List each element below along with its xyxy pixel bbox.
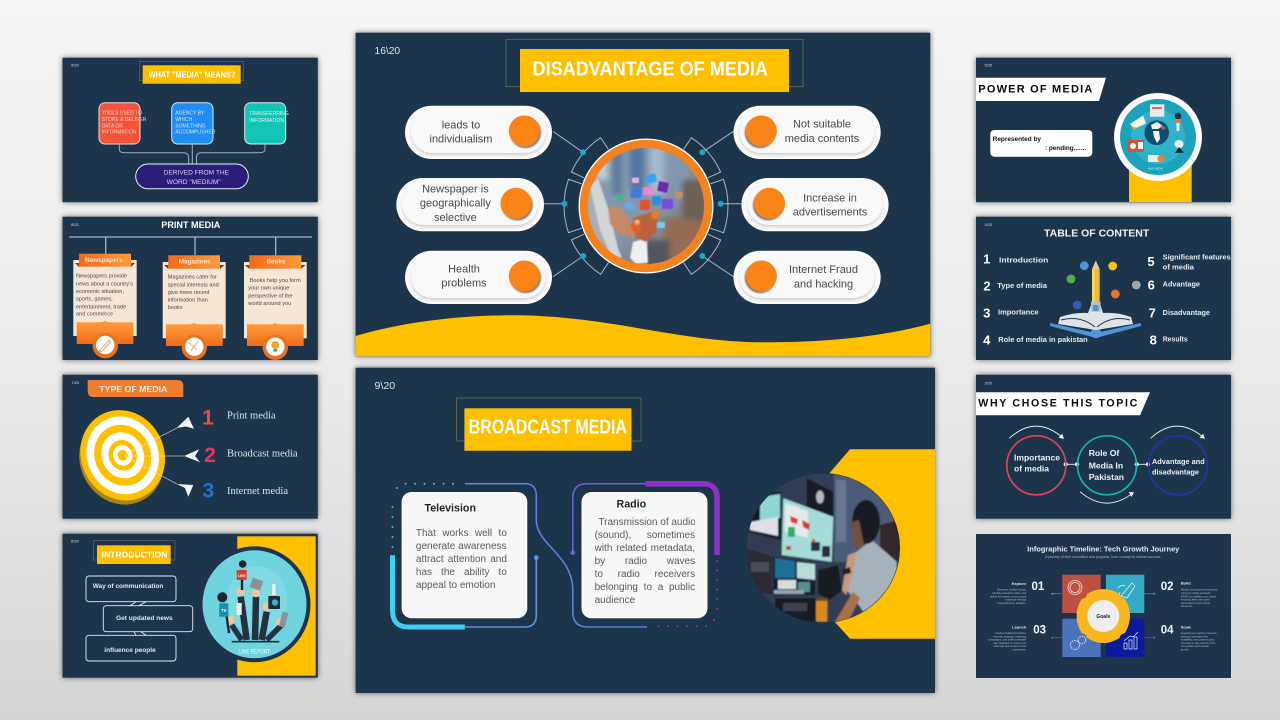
card: magazines: books	[168, 305, 183, 311]
step: scale: scalability, and continuously	[1181, 638, 1214, 642]
card: radio: audience	[595, 594, 635, 606]
heading: print media: PRINT MEDIA	[161, 220, 221, 230]
heading: type of media	[88, 380, 183, 397]
card: radio: to radio receivers	[595, 568, 695, 580]
card: television: attract attention and	[416, 554, 507, 565]
box: agency: WHICH	[175, 117, 193, 123]
card: books: your own unique	[248, 286, 289, 292]
box: transferring: INFORMATION	[249, 118, 284, 124]
list: contents left: 4	[983, 333, 991, 348]
icon: light bulb	[271, 341, 279, 352]
pill: internet fraud and hacking: and hacking	[794, 278, 853, 290]
pill: newspaper is geographically selective: selective	[434, 212, 477, 224]
heading: type of media: TYPE OF MEDIA	[99, 384, 167, 394]
heading: what media means	[139, 61, 243, 84]
card: magazines: Magazines cater for	[168, 275, 217, 281]
page number: 6\20	[71, 538, 80, 544]
list: introduction boxes: Way of communication	[93, 583, 163, 590]
circle: advantage and disadvantage: Advantage and	[1152, 457, 1205, 466]
panel: why chose this topic slide	[976, 375, 1231, 519]
page number: 5\20	[984, 62, 993, 68]
list: contents left: Introduction	[999, 255, 1049, 264]
card: radio: with related metadata,	[595, 542, 695, 554]
panel: power of media slide	[976, 58, 1231, 202]
list: contents right: 6	[1148, 277, 1155, 292]
heading: broadcast media	[456, 398, 641, 451]
circle: advantage and disadvantage	[1148, 436, 1208, 495]
step: explore: 01	[1032, 581, 1045, 593]
card: newspapers: entertainment, trade	[76, 304, 126, 310]
pill: derived from the word medium: DERIVED FROM THE	[164, 170, 230, 177]
heading: disadvantage of media: DISADVANTAGE OF MEDIA	[532, 59, 768, 81]
page number: 3\20	[984, 380, 993, 386]
list: contents left: 2	[983, 279, 991, 294]
pill: leads to individualism	[405, 106, 552, 159]
card: radio: by radio waves	[595, 556, 695, 566]
heading: what media means: WHAT "MEDIA" MEANS?	[149, 69, 235, 79]
step: build	[1161, 580, 1218, 608]
box: represented by pending	[990, 130, 1092, 157]
page number: 16\20	[374, 46, 401, 57]
circle: role of media in pakistan	[1078, 436, 1136, 495]
circle: importance of media: of media	[1014, 463, 1049, 473]
list: introduction boxes: Get updated news	[116, 615, 173, 622]
panel: disadvantage of media slide	[356, 33, 930, 356]
icon: rocket	[1118, 583, 1135, 600]
step: launch: Deploy finalized products,	[996, 631, 1027, 635]
pill: newspaper is geographically selective: geographically	[420, 198, 491, 210]
list: contents right: 7	[1149, 305, 1156, 320]
card: magazines: special interests and	[168, 282, 219, 288]
card: newspapers: sports, games,	[76, 297, 113, 303]
heading: disadvantage of media	[506, 39, 803, 92]
pill: newspaper is geographically selective: Newspaper is	[422, 183, 489, 195]
step: build: 02	[1161, 581, 1173, 593]
card: television	[402, 492, 527, 618]
step: build: Build	[1181, 580, 1191, 585]
card: books: Books help you form	[250, 278, 301, 284]
circle: importance of media: Importance	[1014, 452, 1060, 462]
pill: newspaper is geographically selective	[396, 178, 544, 231]
pill: derived from the word medium: WORD "MEDIUM"	[167, 179, 221, 186]
list: media types	[202, 406, 298, 503]
card: magazines: information than	[168, 298, 208, 304]
pill: internet fraud and hacking: Internet Fraud	[789, 264, 858, 276]
step: scale: optimize operations for	[1181, 634, 1208, 638]
icon: pencil	[99, 340, 110, 352]
step: build: minimum viable products	[1181, 591, 1211, 595]
icon: gears	[1070, 636, 1086, 650]
card: books	[244, 255, 307, 360]
illustration: mass media circle: MASS MEDIA	[1148, 166, 1163, 170]
list: contents left: 3	[983, 306, 990, 321]
heading: why chose this topic	[976, 392, 1150, 415]
heading: table of content: TABLE OF CONTENT	[1044, 229, 1149, 240]
step: launch: user feedback to refine your	[993, 641, 1026, 645]
panel: broadcast media slide	[356, 368, 935, 693]
step: launch: Launch	[1012, 624, 1027, 629]
list: contents right: Significant features	[1163, 252, 1231, 261]
illustration: live report: LIVE	[238, 574, 246, 578]
card: newspapers: news about a country's	[76, 281, 133, 287]
box: tools: STORE & DELIVER	[102, 117, 147, 123]
list: contents right	[1147, 252, 1231, 348]
central photo: hand with app icons	[578, 138, 714, 274]
card: magazines: give more recent	[168, 290, 210, 296]
step: launch	[988, 624, 1046, 652]
page number: 9\20	[71, 62, 80, 68]
connectors and arcs	[1009, 426, 1204, 503]
pill: health problems	[405, 251, 552, 304]
step: launch: 03	[1033, 624, 1046, 636]
yellow pedestal	[1129, 163, 1192, 202]
step: build: expectations and market	[1181, 601, 1210, 605]
bottom yellow wave	[356, 315, 930, 356]
step: build: demands.	[1181, 604, 1193, 608]
card: newspapers: Newspapers	[85, 257, 123, 264]
step: launch: experience.	[1012, 648, 1027, 652]
icon: scissors	[188, 341, 198, 351]
card: newspapers: economic situation,	[76, 289, 124, 295]
list: introduction boxes	[86, 576, 193, 661]
step: build: Design prototypes and develop	[1181, 588, 1218, 592]
heading: timeline: Infographic Timeline: Tech Growth Journey	[1027, 545, 1180, 554]
step: scale: growth.	[1181, 648, 1190, 652]
list: media types: 2	[204, 444, 216, 467]
page number: 4\20	[984, 222, 993, 227]
box: represented by pending: Represented by	[993, 136, 1042, 143]
yellow side panel	[237, 536, 316, 676]
quadrant chart: goals	[1062, 575, 1144, 657]
card: newspapers: Newspapers provide	[76, 274, 127, 280]
connectors	[119, 144, 265, 164]
illustration: mass media circle	[1114, 93, 1202, 181]
step: build: ensuring they meet user	[1181, 598, 1210, 602]
list: contents left: 1	[983, 251, 990, 266]
yellow hexagon backdrop	[815, 449, 935, 639]
circle: advantage and disadvantage: disadvantage	[1152, 467, 1199, 476]
list: contents left: Importance	[998, 308, 1039, 317]
page number: 9\20	[374, 381, 396, 392]
card: magazines: Magazines	[179, 259, 211, 266]
arrows into target	[124, 417, 200, 497]
step: scale: 04	[1161, 624, 1174, 636]
card: radio: belonging to a public	[595, 582, 695, 592]
list: contents right: 8	[1150, 333, 1157, 348]
list: media types: 3	[202, 480, 214, 503]
icon: chat faces	[1068, 580, 1082, 594]
heading: timeline	[1027, 545, 1180, 559]
heading: power of media	[976, 78, 1106, 101]
list: contents right: of media	[1163, 262, 1195, 271]
box: agency	[172, 103, 216, 144]
list: contents left: Role of media in pakistan	[998, 335, 1088, 344]
list: contents left: Type of media	[997, 281, 1048, 290]
box: agency: SOMETHING	[175, 123, 206, 129]
pill: derived from the word medium	[136, 164, 248, 189]
illustration: live report	[198, 546, 310, 662]
step: launch: campaigns, and collect valuable	[988, 638, 1027, 642]
step: explore: audience through	[1006, 598, 1027, 602]
list: introduction boxes: influence people	[104, 647, 156, 654]
box: agency: AGENCY BY	[175, 111, 205, 117]
step: explore	[990, 581, 1045, 605]
card: radio: Radio	[616, 499, 646, 511]
card: magazines	[163, 255, 226, 360]
step: scale: Scale	[1181, 624, 1192, 629]
step: explore: comprehensive analysis.	[997, 601, 1027, 605]
frame lines	[392, 484, 717, 627]
step: explore: Research market trends,	[997, 588, 1027, 592]
box: represented by pending: : pending.......	[1045, 145, 1086, 152]
photo: broadcast control room	[745, 472, 901, 624]
page number: 8\20	[71, 222, 80, 227]
card: television: generate awareness,	[416, 541, 507, 552]
card: television: Television	[424, 502, 476, 514]
panel: type of media slide	[62, 375, 318, 519]
heading: why chose this topic: WHY CHOSE THIS TOPIC	[978, 397, 1138, 409]
circle: role of media in pakistan: Media In	[1089, 460, 1123, 470]
pill: leads to individualism: individualism	[430, 134, 492, 146]
list: contents right: Disadvantage	[1163, 308, 1210, 317]
box: tools	[99, 103, 147, 144]
box: agency: ACCOMPLISHED	[175, 130, 216, 136]
page number: 7\20	[72, 380, 80, 385]
card: books: world around you	[247, 301, 291, 307]
illustration: live report: LIVE REPORT	[239, 650, 270, 656]
card: newspapers: and commerce	[76, 312, 113, 318]
step: explore: Explore	[1012, 581, 1027, 586]
pill: internet fraud and hacking	[734, 251, 881, 304]
card: television: That works well to	[416, 528, 507, 539]
card: television: has the ability to	[416, 567, 507, 578]
list: media types: Internet media	[227, 486, 288, 497]
step: scale: innovate to stay ahead of the	[1181, 641, 1216, 645]
step: scale: Expand your market presence,	[1181, 631, 1218, 635]
illustration: live report: TV	[221, 608, 227, 613]
list: contents right: Advantage	[1163, 280, 1200, 289]
list: contents right: 5	[1147, 254, 1155, 269]
heading: introduction	[93, 541, 175, 564]
list: media types: Print media	[227, 411, 276, 422]
card: radio: Transmission of audio	[598, 516, 695, 528]
card: television: appeal to emotion	[416, 580, 495, 591]
step: explore: define the needs of your target	[990, 594, 1027, 598]
box: tools: DATA OR	[102, 123, 123, 129]
heading: broadcast media: BROADCAST MEDIA	[469, 416, 627, 438]
panel: infographic timeline slide	[976, 534, 1231, 678]
step: scale	[1161, 624, 1218, 652]
pill: leads to individualism: leads to	[442, 119, 480, 131]
pill: health problems: problems	[441, 278, 487, 290]
panel: introduction slide	[62, 534, 318, 678]
target illustration	[63, 396, 181, 519]
card: books: Books	[267, 259, 286, 266]
card: books: perspective of the	[248, 293, 292, 299]
card: radio	[582, 492, 708, 618]
illustration: book and pencil	[1050, 260, 1141, 338]
list: contents right: Results	[1163, 335, 1188, 344]
pill: increase in advertisements	[741, 178, 889, 231]
centre goals shape: Goals	[1096, 614, 1110, 620]
card: newspapers	[73, 254, 137, 358]
icon: growth bars	[1124, 632, 1138, 649]
box: tools: TOOLS USED TO	[102, 111, 142, 117]
circle: role of media in pakistan: Role Of	[1089, 448, 1119, 458]
heading: timeline: A journey of tech innovation and progress, from concept to market success.	[1045, 555, 1161, 559]
card: radio: (sound), sometimes	[595, 530, 695, 540]
circle: role of media in pakistan: Pakistan	[1089, 472, 1124, 482]
panel: table of content slide	[976, 217, 1231, 360]
step: launch: execute strategic marketing	[993, 634, 1027, 638]
connector network	[544, 131, 741, 277]
pill: not suitable media contents: media contents	[785, 133, 860, 145]
pill: increase in advertisements: advertisements	[793, 207, 868, 219]
box: tools: INFORMATION	[102, 130, 137, 136]
pill: increase in advertisements: Increase in	[803, 192, 857, 204]
step: launch: offerings and enhance user	[994, 644, 1026, 648]
list: media types: 1	[202, 406, 214, 429]
list: contents left	[983, 251, 1088, 348]
step: explore: identify potential niches, and	[992, 591, 1027, 595]
pill: not suitable media contents	[734, 106, 881, 159]
circle: importance of media	[1007, 436, 1066, 495]
box: transferring	[245, 103, 289, 144]
panel: print media slide	[62, 217, 318, 360]
heading: power of media: POWER OF MEDIA	[978, 83, 1092, 95]
connector dashes	[1051, 593, 1155, 639]
pill: not suitable media contents: Not suitable	[793, 119, 851, 131]
pill: health problems: Health	[448, 263, 480, 275]
list: media types: Broadcast media	[227, 449, 298, 460]
heading: introduction: INTRODUCTION	[102, 550, 168, 559]
panel: what media means slide	[62, 58, 318, 202]
hanger lines	[69, 237, 312, 255]
step: build: (MVPs) to validate your ideas,	[1181, 594, 1217, 598]
box: transferring: TRANSFERRING	[249, 111, 289, 117]
step: scale: competition and sustain	[1181, 644, 1209, 648]
